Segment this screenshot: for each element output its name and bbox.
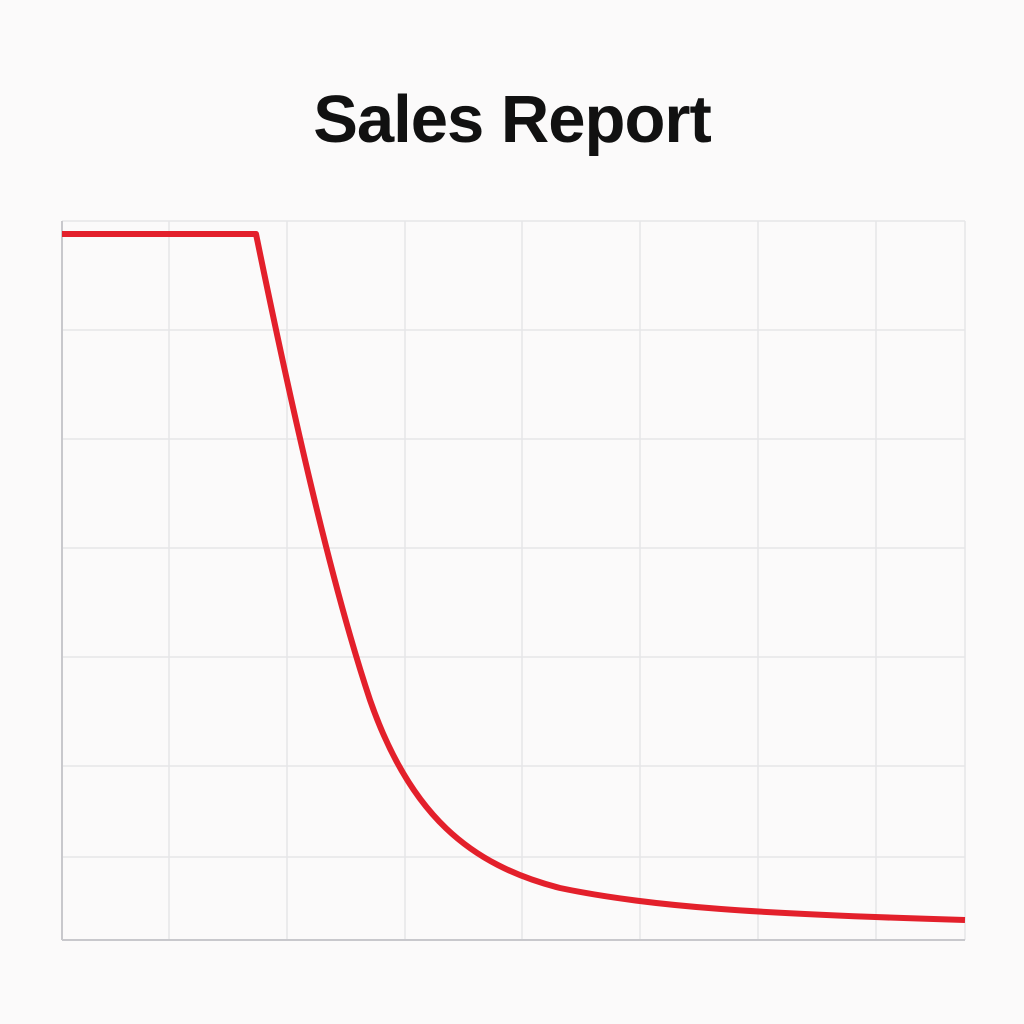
red sales line bbox=[62, 234, 965, 920]
title: Sales Report bbox=[313, 82, 711, 157]
axes bbox=[62, 221, 965, 940]
